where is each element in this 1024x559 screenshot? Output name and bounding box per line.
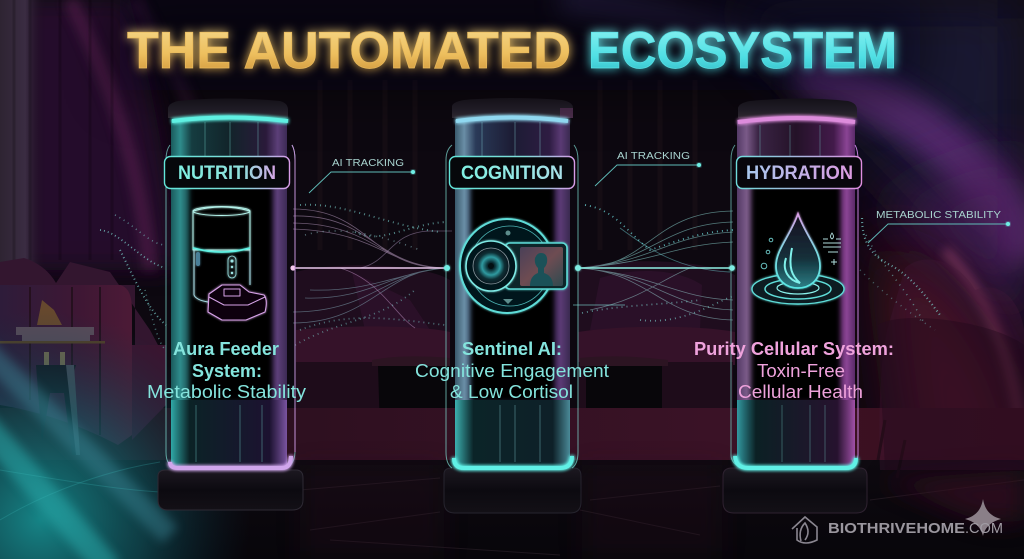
title: THE AUTOMATED bbox=[127, 22, 571, 80]
pillar base bbox=[444, 468, 581, 513]
wall dark vignette around title bbox=[120, 0, 920, 90]
title bbox=[127, 22, 897, 80]
label: hydration bbox=[736, 156, 862, 188]
label: cognition: COGNITION bbox=[461, 162, 563, 184]
top light ring bbox=[456, 118, 568, 121]
pillar: nutrition bbox=[147, 98, 306, 510]
dark screen panel bbox=[471, 186, 554, 401]
data streams: nutrition to cognition bbox=[290, 205, 452, 345]
caption: purity cellular system bbox=[694, 338, 894, 402]
icon: water drop with ripples bbox=[752, 214, 844, 304]
particle wave left of nutrition pillar bbox=[100, 215, 166, 350]
centre sofas bbox=[296, 261, 735, 432]
pillar cap bbox=[738, 98, 857, 118]
pillar glass tube bbox=[171, 120, 287, 466]
label: nutrition bbox=[164, 156, 290, 188]
data streams: cognition to hydration bbox=[573, 205, 735, 321]
caption: purity cellular system: Cellular Health bbox=[738, 382, 863, 402]
curtains left bbox=[0, 0, 205, 270]
outer glass frame bbox=[166, 145, 295, 466]
top light ring bbox=[172, 118, 288, 121]
silhouette bbox=[530, 253, 553, 286]
pillar: hydration bbox=[694, 98, 894, 513]
caption: aura feeder system: Metabolic Stability bbox=[147, 382, 306, 402]
bottom light ring bbox=[454, 456, 572, 468]
pillar: cognition bbox=[415, 98, 609, 513]
callout: metabolic stability: METABOLIC STABILITY bbox=[876, 209, 1001, 221]
label: cognition bbox=[450, 156, 574, 188]
label: hydration: HYDRATION bbox=[746, 162, 853, 184]
lower glass section bbox=[737, 400, 855, 466]
outer glass frame bbox=[731, 145, 738, 466]
icon: house leaf logo bbox=[792, 517, 817, 543]
pillar base bbox=[158, 470, 303, 510]
icon: automatic feeder bbox=[193, 206, 266, 320]
watermark: biothrivehome.com: BIOTHRIVEHOME bbox=[828, 520, 965, 537]
particle wave right of hydration pillar bbox=[860, 218, 940, 330]
pillar cap bbox=[168, 98, 288, 118]
pillar glass tube bbox=[737, 120, 855, 466]
top light ring bbox=[738, 118, 855, 122]
left sofa and side table bbox=[0, 258, 166, 455]
pillar base bbox=[723, 468, 867, 513]
caption: purity cellular system: Toxin-Free bbox=[757, 361, 845, 381]
callout: AI tracking 2: AI TRACKING bbox=[617, 150, 690, 162]
caption: sentinel ai: Sentinel AI: bbox=[462, 338, 562, 359]
title: ECOSYSTEM bbox=[588, 22, 897, 80]
callout: AI tracking 1: AI TRACKING bbox=[332, 157, 404, 169]
caption: purity cellular system: Purity Cellular System: bbox=[694, 338, 894, 359]
watermark: biothrivehome.com bbox=[792, 499, 1003, 543]
caption: aura feeder system bbox=[147, 338, 306, 402]
callout: metabolic stability bbox=[868, 209, 1010, 243]
vertical wall panel stripes bbox=[320, 80, 695, 250]
bottom light ring bbox=[170, 456, 291, 468]
caption: sentinel ai: & Low Cortisol bbox=[450, 382, 573, 402]
purple swirl right bbox=[560, 0, 1024, 559]
outer glass frame bbox=[446, 145, 578, 468]
lower glass section bbox=[171, 400, 287, 466]
right armchair bbox=[878, 259, 1024, 478]
pillar glass tube bbox=[455, 120, 570, 466]
teal light beam lower left bbox=[0, 300, 260, 559]
caption: sentinel ai: Cognitive Engagement bbox=[415, 361, 609, 381]
caption: aura feeder system: Aura Feeder bbox=[173, 338, 279, 359]
dark screen panel bbox=[752, 186, 840, 401]
lower glass section bbox=[455, 400, 570, 466]
callout: AI tracking 2 bbox=[595, 150, 701, 186]
caption: sentinel ai bbox=[415, 338, 609, 402]
icon: sparkle bbox=[965, 499, 1001, 536]
icon: sentinel camera bbox=[460, 219, 567, 313]
label: nutrition: NUTRITION bbox=[178, 162, 276, 184]
bottom light ring bbox=[735, 456, 856, 468]
callout: AI tracking 1 bbox=[309, 157, 415, 193]
rug and floor bbox=[0, 408, 1024, 559]
watermark: biothrivehome.com: .COM bbox=[965, 521, 1003, 537]
caption: aura feeder system: System: bbox=[192, 360, 262, 381]
pillar cap bbox=[452, 98, 573, 118]
dark screen panel bbox=[190, 186, 272, 401]
